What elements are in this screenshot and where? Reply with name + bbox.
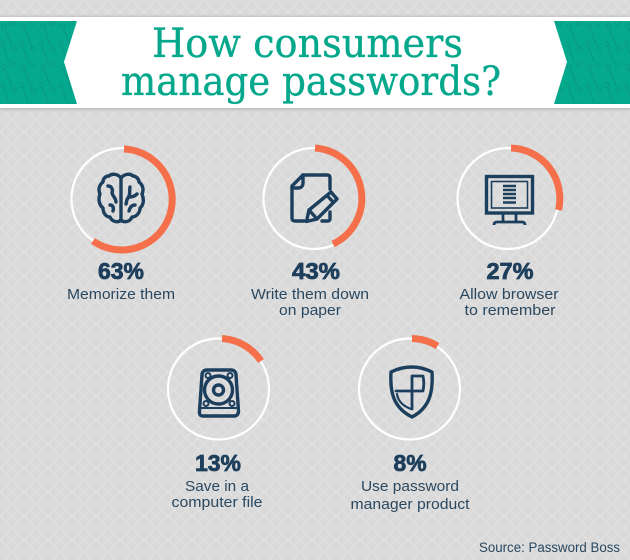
title [121,21,501,105]
value: 43% [292,258,340,284]
value: 8% [394,450,427,476]
label: on paper [279,302,341,319]
value: 13% [195,450,241,476]
label [350,478,470,513]
label: Memorize them [67,286,175,303]
icon: brain [99,174,143,222]
source: Source: Password Boss [479,540,620,555]
title: manage passwords? [121,59,501,105]
value: 63% [98,258,144,284]
label [172,478,262,511]
label: computer file [172,494,262,511]
title: How consumers [152,21,463,67]
label: manager product [350,496,470,513]
icon: monitor [486,176,532,225]
label: Allow browser [460,286,558,303]
label [251,286,369,319]
icon: shield [391,367,432,417]
value: 27% [486,258,534,284]
stat: memorize [67,148,175,303]
label: Save in a [185,478,250,495]
stat: password manager [350,338,470,513]
label: Use password [361,478,459,495]
label: Write them down [251,286,369,303]
ring 13% [168,338,269,440]
stat: paper [251,148,369,319]
icon: document and pencil [292,175,337,222]
left ribbon [0,21,77,104]
ring 43% [264,148,364,249]
ring 8% [359,338,460,440]
ring 63% [72,148,174,250]
ring 27% [458,148,560,249]
right ribbon [554,21,630,104]
label: to remember [464,302,556,319]
header banner [0,16,630,110]
stat: browser [458,148,560,319]
icon: hard drive [199,370,238,416]
stat: computer file [168,338,269,511]
label [460,286,558,319]
